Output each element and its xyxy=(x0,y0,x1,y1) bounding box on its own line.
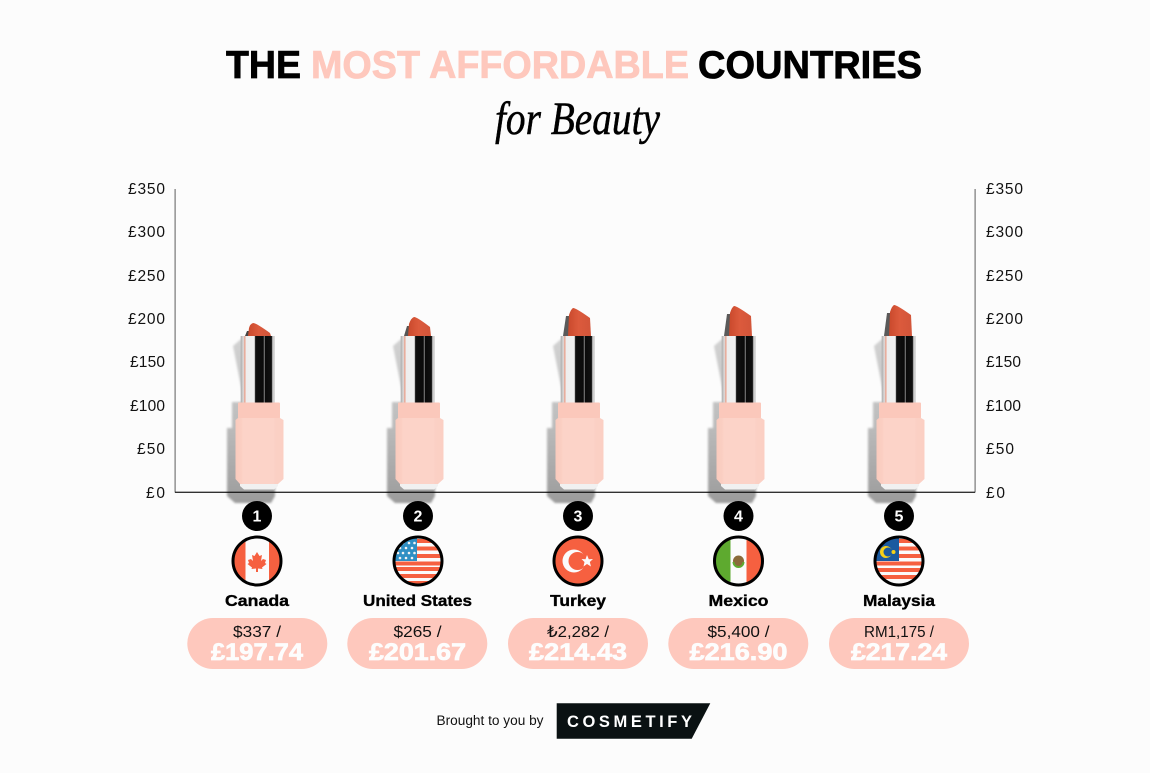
title: THE xyxy=(226,44,301,87)
title: COUNTRIES xyxy=(698,44,922,87)
right axis labels: £150 xyxy=(986,354,1021,371)
subtitle: for Beauty xyxy=(495,93,660,145)
column: United States xyxy=(347,501,487,669)
column: Mexico xyxy=(668,501,808,669)
rank badge 4 xyxy=(724,501,754,531)
right axis labels: £0 xyxy=(986,485,1005,502)
price pill: £214.43 xyxy=(529,639,627,666)
country name: Turkey xyxy=(550,593,606,610)
icon: Mexico flag xyxy=(714,536,764,586)
rank badge 1 xyxy=(242,501,272,531)
right axis labels: £250 xyxy=(986,268,1023,285)
left axis labels: £250 xyxy=(128,268,165,285)
price pill: RM1,175 / xyxy=(864,624,935,641)
title: MOST AFFORDABLE xyxy=(311,44,689,87)
title xyxy=(226,44,922,87)
icon: United States flag xyxy=(393,536,443,586)
left axis labels: £150 xyxy=(130,354,165,371)
rank badge 2 xyxy=(403,501,433,531)
rank badge 5 xyxy=(884,501,914,531)
lipstick: Canada £197.74 xyxy=(227,323,284,503)
rank badge 3 xyxy=(563,501,593,531)
left axis labels: £100 xyxy=(130,398,165,415)
left axis labels: £350 xyxy=(128,181,165,198)
left axis labels xyxy=(128,181,165,502)
price pill: $5,400 / xyxy=(708,624,770,641)
right axis labels: £50 xyxy=(986,441,1014,458)
rank badge 1: 1 xyxy=(253,508,262,526)
price pill xyxy=(829,618,969,669)
price pill: £217.24 xyxy=(851,639,948,666)
price pill: ₺2,282 / xyxy=(547,624,610,641)
column: Canada xyxy=(187,501,327,669)
chart axes xyxy=(174,189,976,493)
right axis labels: £350 xyxy=(986,181,1023,198)
left axis labels: £50 xyxy=(137,441,165,458)
lipstick: United States £201.67 xyxy=(387,317,444,503)
country name: Malaysia xyxy=(863,593,935,610)
credit text: Brought to you by xyxy=(436,713,544,728)
left axis labels: £200 xyxy=(128,311,165,328)
rank badge 2: 2 xyxy=(414,508,423,526)
price pill xyxy=(187,618,327,669)
icon: Malaysia flag xyxy=(874,536,924,586)
lipstick: Turkey £214.43 xyxy=(547,308,604,503)
lipstick: Mexico £216.90 xyxy=(708,306,764,503)
price pill xyxy=(508,618,648,669)
price pill: $337 / xyxy=(233,624,282,641)
lipstick chart xyxy=(227,305,924,503)
column: Turkey xyxy=(508,501,648,669)
rank badge 5: 5 xyxy=(895,508,904,526)
country name: Canada xyxy=(225,593,289,610)
icon: Canada flag xyxy=(232,536,282,586)
logo: Cosmetify: COSMETIFY xyxy=(567,713,692,731)
right axis labels xyxy=(986,181,1023,502)
right axis labels: £100 xyxy=(986,398,1021,415)
price pill: $265 / xyxy=(394,624,442,641)
left axis labels: £300 xyxy=(128,224,165,241)
price pill: £216.90 xyxy=(690,639,788,666)
country name: Mexico xyxy=(708,593,769,610)
price pill: £201.67 xyxy=(369,639,466,666)
right axis labels: £200 xyxy=(986,311,1023,328)
rank badge 4: 4 xyxy=(734,508,743,526)
logo: Cosmetify xyxy=(557,703,710,739)
icon: Turkey flag xyxy=(553,536,603,586)
lipstick: Malaysia £217.24 xyxy=(868,305,924,503)
price pill xyxy=(668,618,808,669)
country name: United States xyxy=(363,593,472,610)
column: Malaysia xyxy=(829,501,969,669)
rank badge 3: 3 xyxy=(574,508,583,526)
price pill xyxy=(347,618,487,669)
right axis labels: £300 xyxy=(986,224,1023,241)
left axis labels: £0 xyxy=(146,485,165,502)
price pill: £197.74 xyxy=(211,639,304,666)
